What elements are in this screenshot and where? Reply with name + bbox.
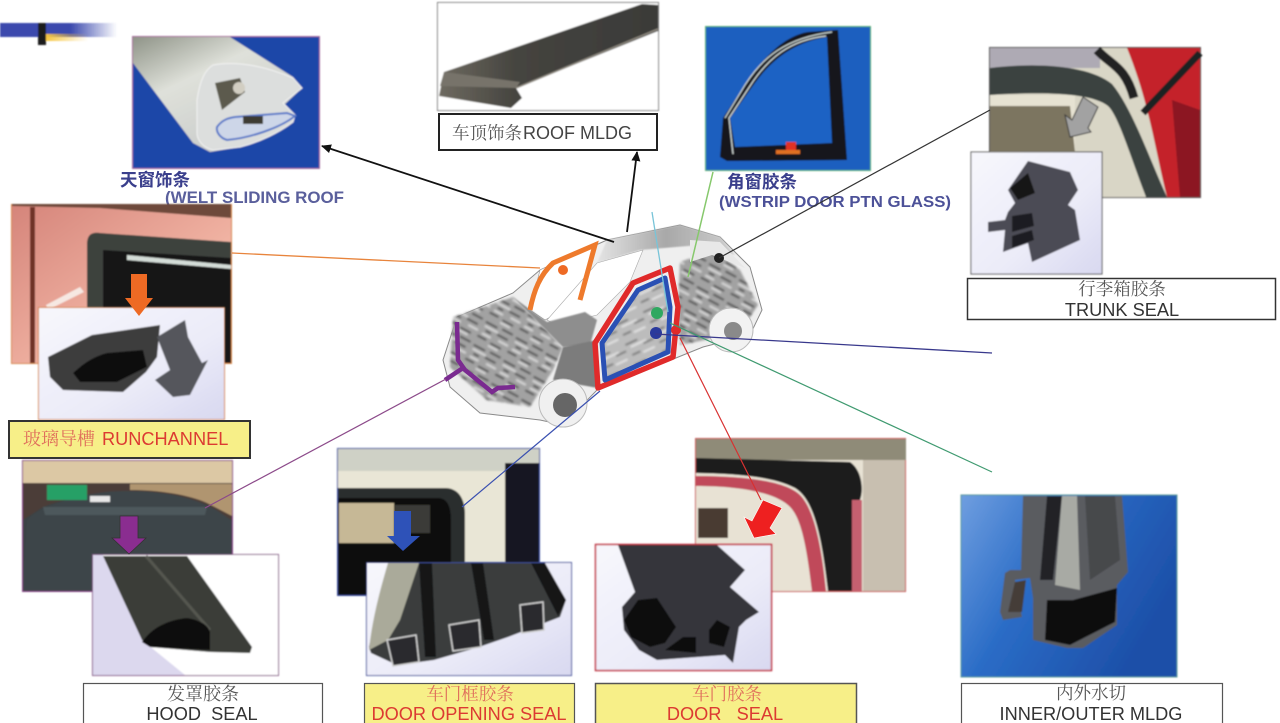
arrow: blue (387, 511, 420, 551)
photo: hood context (22, 460, 232, 592)
label: door opening seal (364, 681, 574, 723)
label: trunk seal (968, 276, 1276, 320)
leader: runchannel (232, 253, 540, 268)
photo: inner/outer moulding (961, 495, 1177, 677)
label: roof moulding: ROOF MLDG (523, 123, 632, 143)
seal mark: hood (445, 322, 515, 392)
label: inner/outer moulding (962, 680, 1222, 723)
label: door seal: 车门胶条 (692, 681, 762, 706)
leader: cyan (652, 212, 668, 312)
dot: runchannel (558, 265, 568, 275)
leader: door opening (462, 391, 600, 507)
photo: runchannel section (38, 308, 224, 420)
photo: door seal section (596, 544, 772, 670)
floor (602, 278, 670, 380)
label: runchannel: 玻璃导槽 (23, 425, 95, 451)
dot: black (714, 253, 724, 263)
arrow: red (744, 500, 782, 538)
label: door partition glass strip: (WSTRIP DOOR PTN GLASS) (719, 194, 951, 211)
seal mark: door opening (602, 278, 670, 380)
photo: trunk seal section (971, 152, 1102, 274)
side window (547, 250, 643, 325)
rear structure (678, 250, 758, 345)
windshield (530, 243, 597, 320)
photo: runchannel context (12, 204, 232, 364)
photo: door opening section (366, 562, 572, 676)
leader: inner molding navy (655, 334, 992, 353)
arrow: purple (112, 516, 146, 554)
seal mark: door seal (595, 268, 678, 388)
car illustration (443, 225, 762, 427)
leader: door seal (680, 338, 761, 500)
seal mark: runchannel (530, 245, 595, 310)
label: inner/outer moulding: 内外水切 (1056, 680, 1126, 705)
leader: outer molding green (670, 323, 992, 472)
roof (597, 225, 735, 263)
car body (443, 225, 762, 425)
label: hood seal (84, 680, 322, 723)
leader: door glass (688, 172, 713, 277)
photo: door partition glass strip (706, 26, 870, 170)
label: door partition glass strip (719, 169, 951, 211)
leader: welt roof (322, 146, 614, 242)
photo: hood seal section (92, 554, 278, 676)
photo: door seal context (696, 438, 906, 592)
leader: roof moulding (627, 152, 637, 232)
label: roof moulding (439, 114, 657, 150)
arrow: orange (125, 274, 153, 316)
engine bay (450, 297, 563, 407)
label: welt sliding roof: 天窗饰条 (120, 167, 190, 192)
photo: door opening context (338, 448, 540, 596)
decorative corner bar (0, 23, 117, 45)
sill (553, 340, 598, 388)
photo: roof moulding (438, 2, 658, 110)
photo: welt sliding roof (132, 36, 320, 168)
dot: navy (650, 327, 662, 339)
wheels (539, 379, 587, 427)
label: runchannel: RUNCHANNEL (102, 429, 228, 449)
leader: trunk (719, 110, 990, 258)
dot: red (671, 325, 681, 335)
leader lines (205, 110, 992, 508)
label: door opening seal: 车门框胶条 (426, 681, 514, 706)
label: welt sliding roof: (WELT SLIDING ROOF (165, 189, 344, 207)
label: runchannel (9, 421, 250, 458)
label: trunk seal: 行李箱胶条 (1078, 276, 1166, 301)
label: door partition glass strip: 角窗胶条 (727, 169, 797, 194)
label: trunk seal: TRUNK SEAL (1065, 300, 1179, 320)
label: welt sliding roof (120, 167, 344, 207)
leader: hood (205, 379, 446, 508)
cowl (513, 297, 597, 347)
dot: green (651, 307, 663, 319)
label: roof moulding: 车顶饰条 (452, 120, 522, 145)
photo: trunk seal context (990, 48, 1200, 198)
label: hood seal: 发罩胶条 (167, 680, 239, 706)
label: door seal (596, 681, 856, 723)
